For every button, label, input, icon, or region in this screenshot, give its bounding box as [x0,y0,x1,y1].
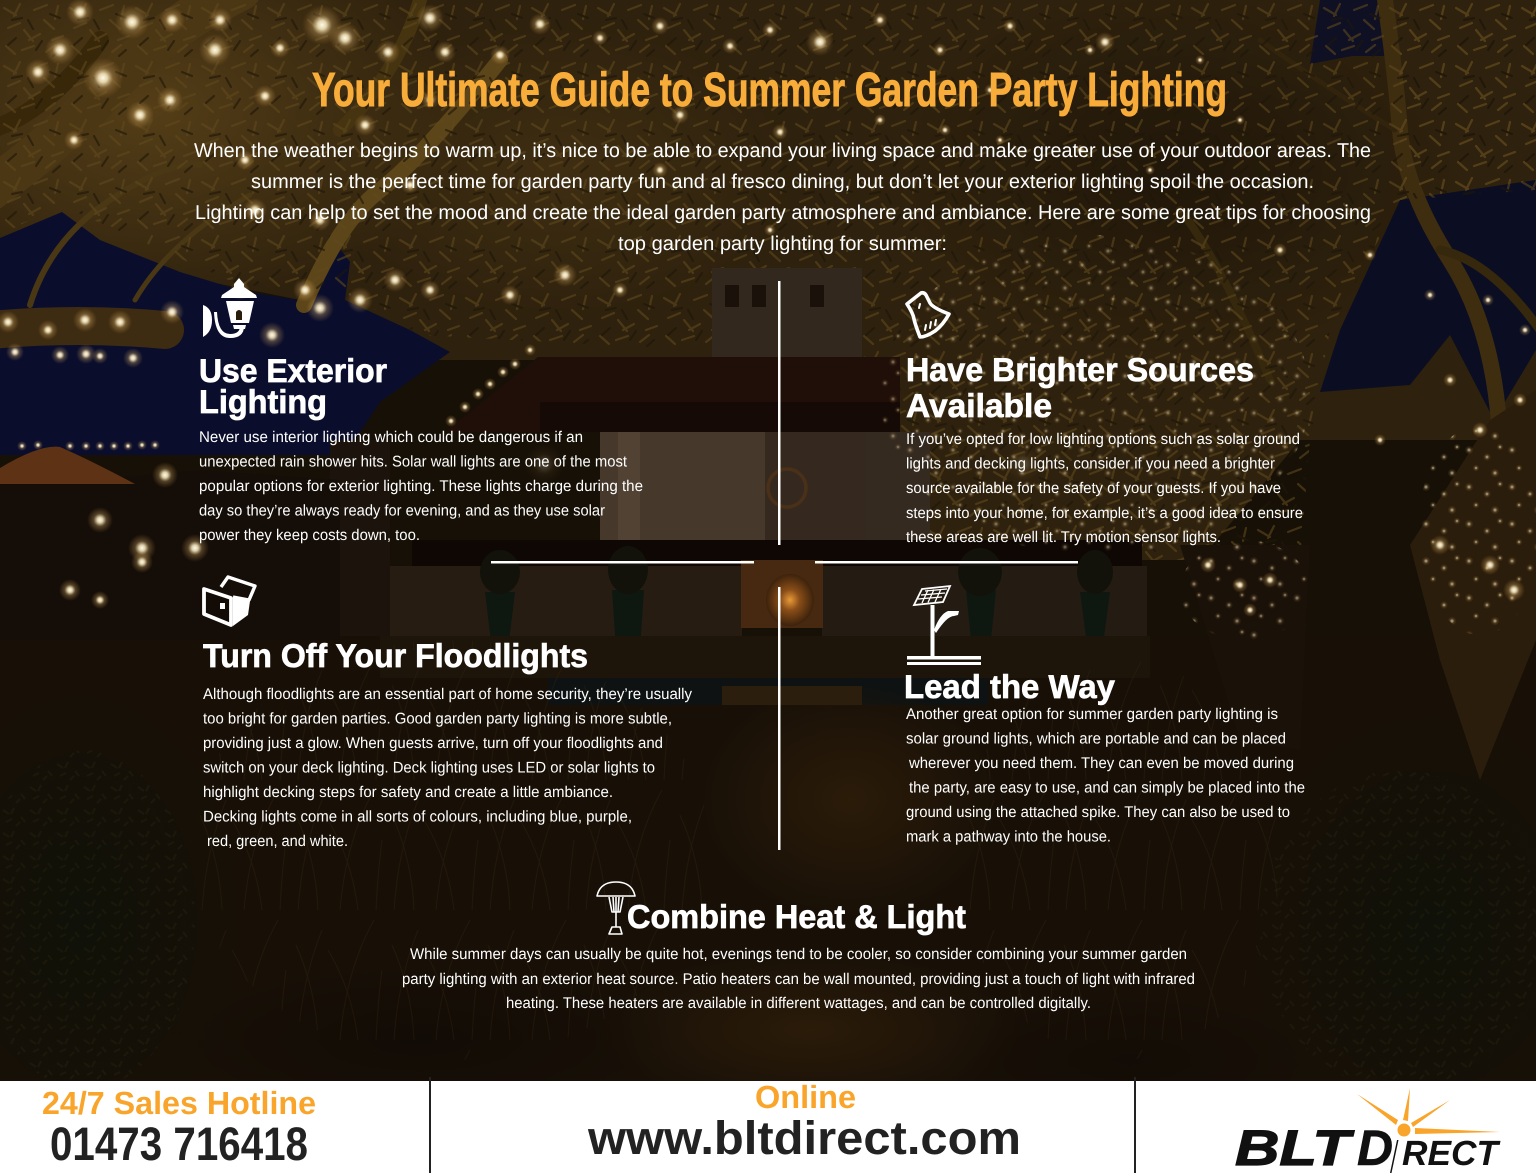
body text: mark a pathway into the house. [906,828,1111,846]
body text: red, green, and white. [207,833,348,850]
house [330,268,1147,640]
panel: have brighter sources available [906,293,1303,546]
heading: Turn Off Your Floodlights [203,637,588,674]
body text: providing just a glow. When guests arrive, turn off your floodlights and [203,735,663,752]
heading [906,351,1254,424]
icon: wall lantern [203,278,257,338]
panel: use exterior lighting [199,278,643,544]
body text [906,706,1305,846]
title: Your Ultimate Guide to Summer Garden Party Lighting [312,64,1227,117]
heading: Lead the Way [904,668,1116,705]
body text: highlight decking steps for safety and create a little ambiance. [203,784,613,801]
body text: steps into your home, for example, it’s a good idea to ensure [906,505,1303,522]
body text: lights and decking lights, consider if you need a brighter [906,456,1275,472]
intro text: top garden party lighting for summer: [618,233,947,255]
garden ground, pool and path [0,636,1536,1160]
heading: Use Exterior [199,352,387,389]
body text: ground using the attached spike. They can also be used to [906,804,1290,821]
fairy lights [0,0,1531,617]
trunks and branches [0,0,1536,440]
tree canopy tone [0,0,1536,560]
body text: Never use interior lighting which could be dangerous if an [199,429,583,446]
body text: heating. These heaters are available in different wattages, and can be controlled digitally. [506,995,1091,1012]
body text: wherever you need them. They can even be moved during [908,755,1294,772]
heading: Combine Heat & Light [627,898,966,935]
body text [906,431,1303,546]
panel: turn off your floodlights [203,577,692,850]
foliage texture [0,0,1536,560]
body text: day so they’re always ready for evening, and as they use solar [199,502,605,520]
online address: Online [755,1079,856,1115]
body text [203,686,692,850]
body text: Although floodlights are an essential part of home security, they’re usually [203,686,692,703]
body text [199,429,643,544]
footer bar [0,1077,1536,1173]
heading [199,352,387,420]
body text: popular options for exterior lighting. These lights charge during the [199,478,643,495]
logo: BLT Direct [1235,1088,1501,1173]
intro text: Lighting can help to set the mood and create the ideal garden party atmosphere and ambiance. Here are some great tips for choosing [195,202,1371,224]
online address: www.bltdirect.com [587,1111,1021,1164]
intro text: When the weather begins to warm up, it’s nice to be able to expand your living space and make greater use of your outdoor areas. The [194,140,1371,162]
icon: lamp shade [907,293,949,337]
icon: patio heater [597,882,635,934]
heading: Lighting [199,383,327,420]
body text: too bright for garden parties. Good garden party lighting is more subtle, [203,710,672,728]
body text: switch on your deck lighting. Deck lighting uses LED or solar lights to [203,760,655,776]
logo: BLT Direct: RECT [1402,1134,1501,1173]
body text: power they keep costs down, too. [199,527,420,544]
body text: Decking lights come in all sorts of colours, including blue, purple, [203,808,632,826]
intro text: summer is the perfect time for garden party fun and al fresco dining, but don’t let your exterior lighting spoil the occasion. [251,171,1314,193]
sales hotline: 01473 716418 [50,1117,308,1170]
icon: solar ground light [907,586,981,665]
body text: the party, are easy to use, and can simply be placed into the [909,780,1305,796]
body text [402,946,1195,1012]
night sky patches [0,0,1536,455]
dividers: central cross [491,281,1078,850]
heading: Have Brighter Sources [906,351,1254,388]
body text: these areas are well lit. Try motion sensor lights. [906,529,1221,546]
body text: source available for the safety of your guests. If you have [906,480,1281,497]
body text: unexpected rain shower hits. Solar wall lights are one of the most [199,454,628,470]
potted plants [480,546,1113,665]
body text: party lighting with an exterior heat source. Patio heaters can be wall mounted, providing just a touch of light with infrared [402,971,1195,988]
panel: lead the way [904,586,1305,846]
sales hotline [42,1085,316,1170]
intro text [194,140,1371,255]
panel: combine heat and light [402,882,1195,1012]
heading: Available [906,387,1052,424]
body text: While summer days can usually be quite hot, evenings tend to be cooler, so consider combining your summer garden [410,946,1187,963]
garden left corner and right tree [0,235,1536,780]
body text: If you’ve opted for low lighting options such as solar ground [906,431,1300,448]
icon: floodlight [204,577,255,626]
body text: solar ground lights, which are portable and can be placed [906,730,1286,748]
sales hotline: 24/7 Sales Hotline [42,1085,316,1121]
body text: Another great option for summer garden party lighting is [906,706,1278,723]
online address [587,1079,1021,1164]
